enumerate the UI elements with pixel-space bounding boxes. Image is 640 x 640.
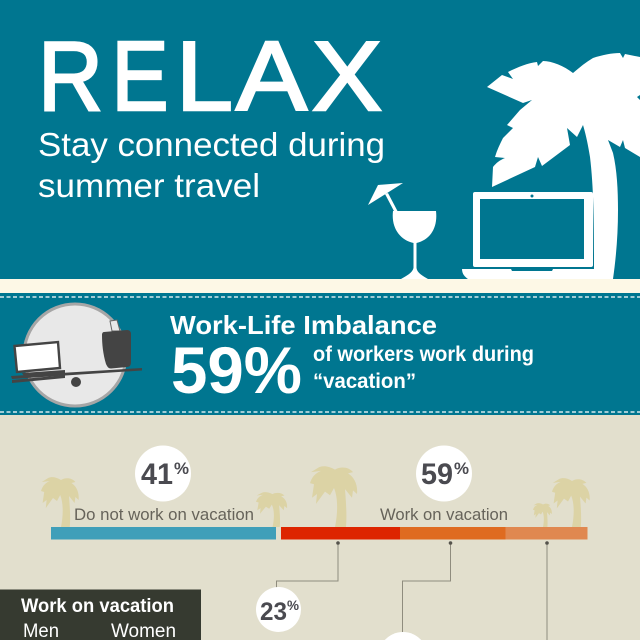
panel: work on vacation by gender: Work on vacation bbox=[21, 596, 174, 617]
stat: 23%: % bbox=[287, 597, 300, 613]
statistic description: “vacation” bbox=[313, 370, 416, 393]
stat: 23% bbox=[256, 587, 301, 632]
subtitle bbox=[38, 126, 385, 204]
stat: 41% do not work on vacation: Do not work on vacation bbox=[74, 505, 254, 524]
cream ground strip bbox=[0, 279, 640, 293]
statistic description: of workers work during bbox=[313, 343, 534, 366]
panel: work on vacation by gender bbox=[0, 590, 201, 640]
stat circle, cropped at bottom bbox=[385, 632, 421, 640]
statistic description bbox=[313, 343, 534, 393]
stat: 23%: 23 bbox=[260, 598, 287, 626]
stat: 41% do not work on vacation: 41 bbox=[141, 458, 173, 491]
subtitle: Stay connected during bbox=[38, 126, 385, 163]
decorative palm trees bbox=[41, 466, 590, 527]
icon: cocktail glass with umbrella bbox=[368, 183, 436, 279]
icon: laptop bbox=[462, 192, 604, 279]
lower beige background bbox=[0, 415, 640, 640]
icon: palm tree bbox=[487, 53, 640, 279]
connector lines bbox=[276, 543, 547, 640]
icon: balance scale with laptop and suitcase bbox=[11, 304, 142, 406]
subtitle: summer travel bbox=[38, 167, 260, 204]
stacked bar chart bbox=[51, 527, 588, 540]
title bbox=[38, 21, 382, 131]
heading: work-life imbalance: Work-Life Imbalance bbox=[170, 310, 437, 340]
title: L bbox=[176, 21, 233, 131]
connector dots bbox=[336, 541, 549, 545]
header background bbox=[0, 0, 640, 279]
stat: 59% work on vacation: 59 bbox=[421, 458, 453, 491]
panel: work-life imbalance bbox=[0, 293, 640, 415]
title: X bbox=[312, 21, 382, 131]
stat: 59% work on vacation: % bbox=[454, 459, 469, 478]
title: E bbox=[112, 21, 168, 131]
stat: 41% do not work on vacation bbox=[74, 446, 254, 524]
title: R bbox=[38, 21, 103, 131]
stat: 59% work on vacation: Work on vacation bbox=[380, 505, 508, 524]
stat: 59% work on vacation bbox=[380, 446, 508, 524]
stat: 41% do not work on vacation: % bbox=[174, 459, 189, 478]
big statistic 59%: 59% bbox=[171, 333, 302, 407]
title: A bbox=[236, 21, 308, 131]
